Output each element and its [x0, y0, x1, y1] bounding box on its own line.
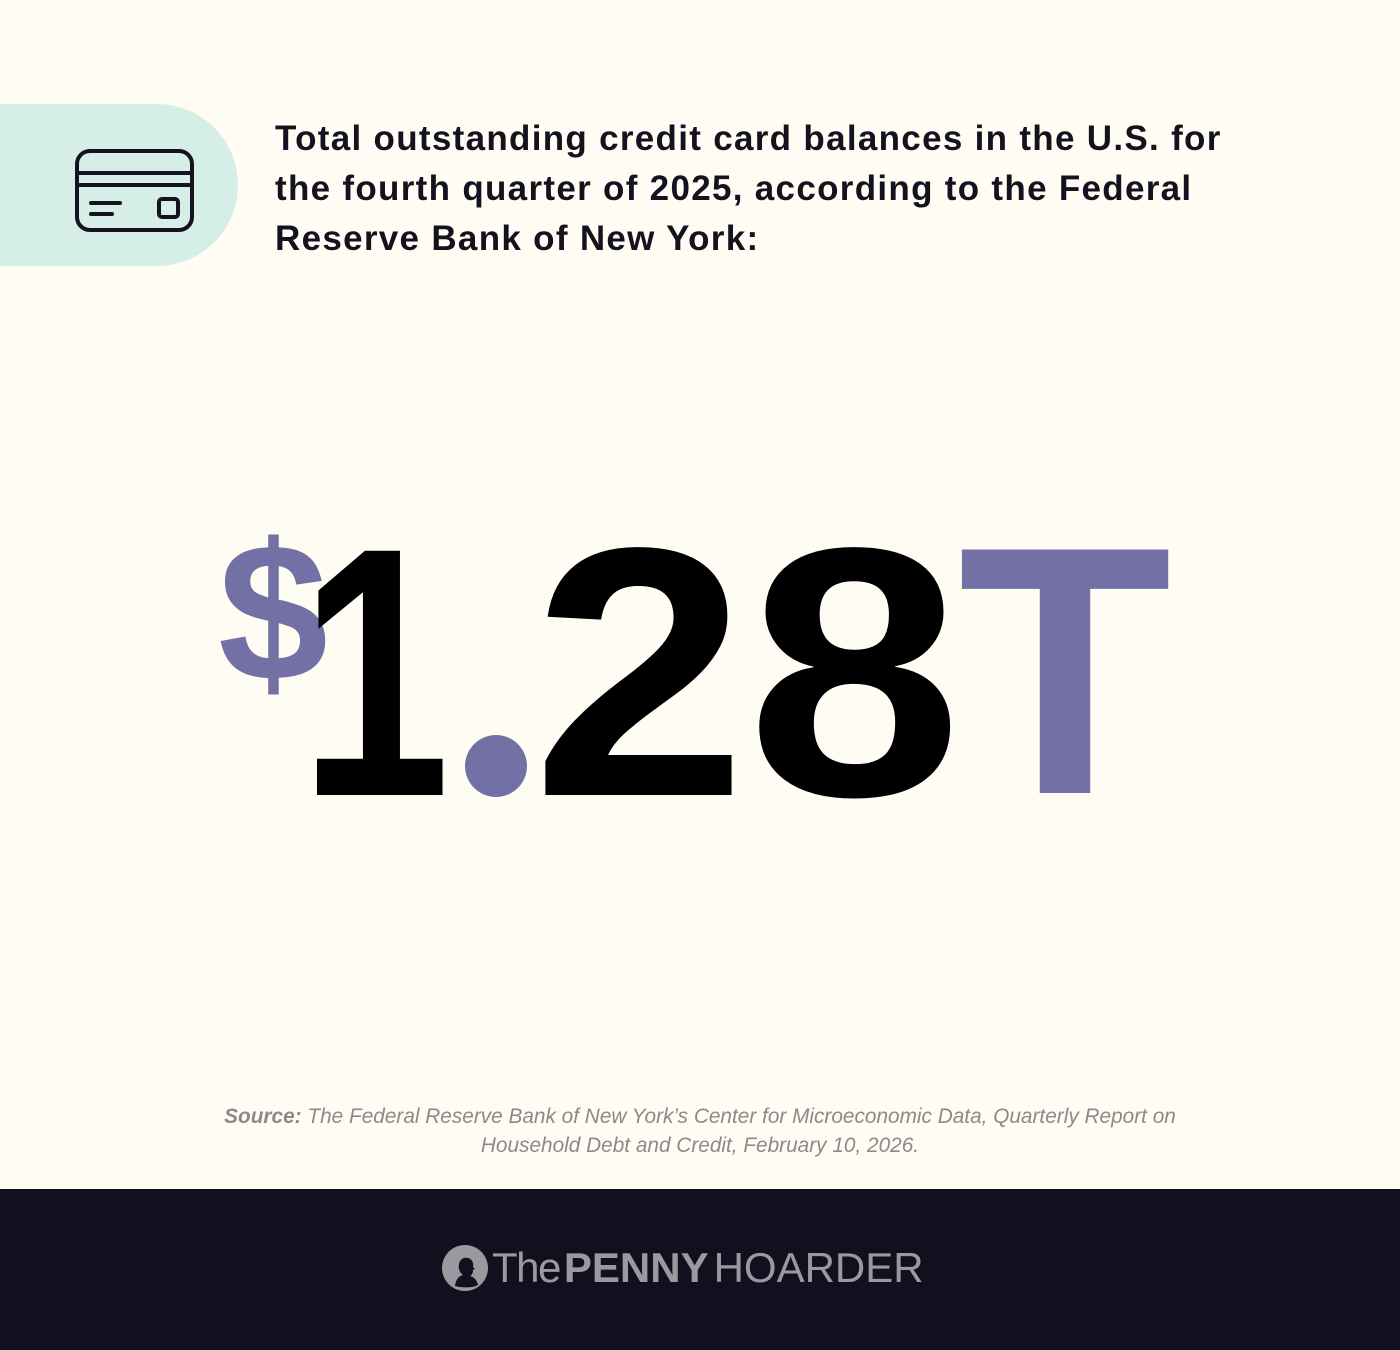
logo: PENNY: [564, 1244, 709, 1291]
big number: T: [958, 474, 1172, 869]
big number: 1: [300, 475, 450, 871]
big number: 28: [532, 475, 962, 871]
source note: Household Debt and Credit, February 10, 2026.: [481, 1134, 919, 1157]
source note: Source: The Federal Reserve Bank of New York’s Center for Microeconomic Data, Quarterly Report on: [224, 1105, 1176, 1128]
source note: [224, 1105, 1176, 1157]
footer with logo: [0, 1189, 1400, 1350]
icon pill: credit card: [0, 104, 238, 266]
title: Reserve Bank of New York:: [275, 219, 759, 258]
title: the fourth quarter of 2025, according to the Federal: [275, 169, 1192, 208]
logo: The: [492, 1244, 560, 1291]
logo: HOARDER: [714, 1244, 924, 1291]
big number: $: [218, 503, 328, 722]
logo: [442, 1244, 924, 1291]
title: Total outstanding credit card balances in the U.S. for: [275, 119, 1222, 158]
title: [275, 119, 1222, 258]
